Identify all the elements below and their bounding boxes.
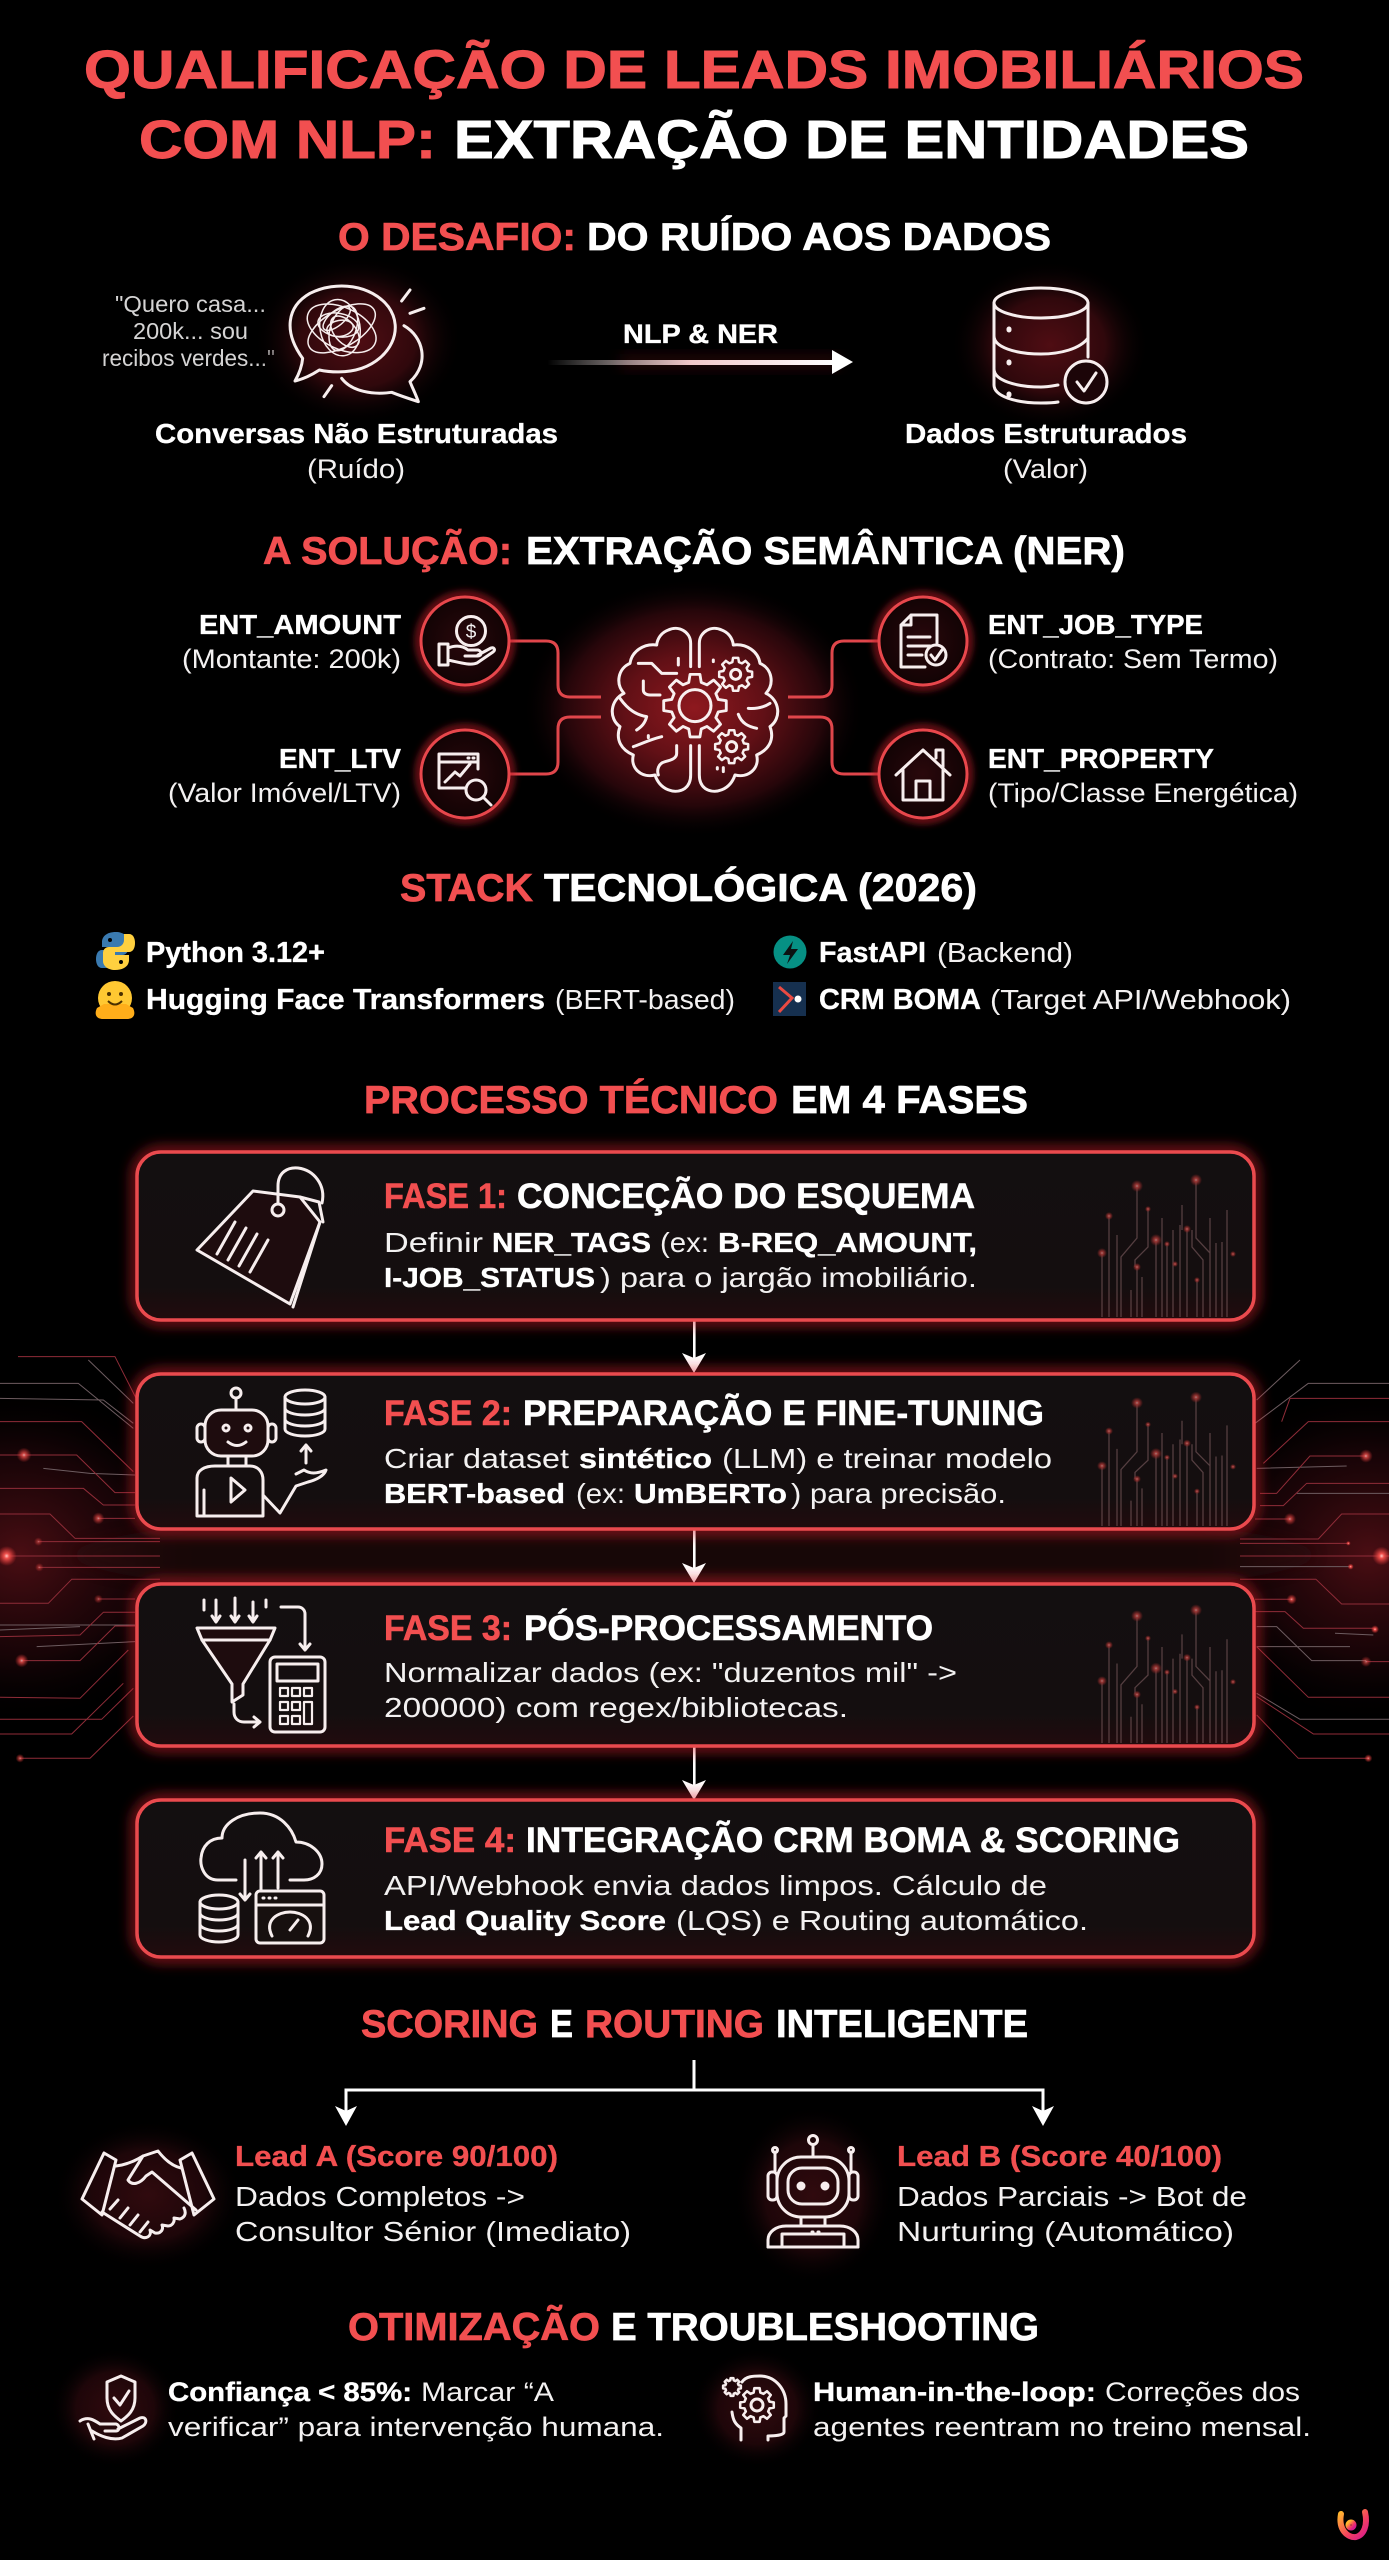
- text: fase 1: NER_TAGS: [492, 1227, 651, 1258]
- text: fase 4: (LQS) e Routing automático.: [676, 1905, 1088, 1936]
- text: confidence: Confiança < 85%:: [168, 2377, 412, 2407]
- text: lead B: Lead B (Score 40/100): [897, 2141, 1222, 2173]
- panel: tech stack list: [96, 932, 1291, 1019]
- icon: tangled chat bubbles: [253, 255, 463, 425]
- node: ENT_AMOUNT: $: [466, 622, 477, 643]
- text: fase 2: (LLM) e treinar modelo: [722, 1443, 1052, 1474]
- panel: noise to data: [102, 255, 1187, 484]
- icon: crm boma: [773, 982, 806, 1016]
- text: hugging face: [146, 984, 735, 1016]
- label: structured data: [905, 418, 1187, 484]
- quote text: [102, 291, 275, 371]
- text: lead A: [235, 2141, 631, 2247]
- icon: robot with database: [197, 1388, 326, 1516]
- text: crm boma: (Target API/Webhook): [990, 984, 1291, 1015]
- heading: processo técnico: [364, 1078, 1028, 1122]
- heading: o desafio: DO RUÍDO AOS DADOS: [587, 215, 1051, 259]
- heading: a solução: EXTRAÇÃO SEMÂNTICA (NER): [526, 529, 1125, 573]
- connectors: [509, 641, 880, 774]
- text: human in the loop: Correções dos: [1105, 2377, 1300, 2407]
- quote text: 200k... sou: [133, 318, 248, 344]
- text: fase 1: FASE 1:: [384, 1177, 507, 1216]
- heading: scoring e routing: E: [550, 2003, 573, 2046]
- panel: fase 2: [137, 1374, 1254, 1529]
- text: crm boma: CRM BOMA: [819, 984, 981, 1016]
- icon: head with gears: [692, 2348, 822, 2468]
- heading: stack tecnológica: STACK: [400, 867, 533, 910]
- icon: fastapi: [774, 936, 806, 968]
- heading: scoring e routing: SCORING: [361, 2003, 538, 2046]
- text: confidence: [168, 2377, 664, 2442]
- text: lead B: Dados Parciais -> Bot de: [897, 2181, 1247, 2212]
- arrows between phases: [682, 1320, 706, 1800]
- text: lead A: Dados Completos ->: [235, 2181, 525, 2212]
- icon: cloud, database and dashboard: [200, 1813, 324, 1943]
- text: fase 4: INTEGRAÇÃO CRM BOMA & SCORING: [526, 1821, 1180, 1860]
- text: fase 1: CONCEÇÃO DO ESQUEMA: [517, 1177, 975, 1216]
- label: unstructured conversations: [155, 418, 558, 484]
- heading: otimização: E TROUBLESHOOTING: [611, 2306, 1039, 2349]
- text: fase 2: [384, 1394, 1052, 1509]
- heading: processo técnico: EM 4 FASES: [791, 1079, 1028, 1122]
- text: ENT_JOB_TYPE: (Contrato: Sem Termo): [988, 644, 1278, 674]
- icon: hugging face: [96, 981, 134, 1019]
- title: EXTRAÇÃO DE ENTIDADES: [454, 110, 1249, 170]
- text: fase 2: BERT-based: [384, 1478, 565, 1509]
- text: fase 2: sintético: [579, 1443, 712, 1474]
- panel: confidence: [50, 2348, 664, 2468]
- node: ENT_PROPERTY: [877, 728, 969, 820]
- text: lead B: Nurturing (Automático): [897, 2216, 1234, 2247]
- icon: price tags: [197, 1168, 323, 1307]
- icon: brain with gears: [522, 578, 866, 838]
- text: human in the loop: agentes reentram no treino mensal.: [813, 2412, 1311, 2442]
- node: ENT_JOB_TYPE: [877, 595, 969, 687]
- text: python: Python 3.12+: [146, 937, 325, 969]
- heading: processo técnico: PROCESSO TÉCNICO: [364, 1078, 778, 1122]
- text: fase 1: ) para o jargão imobiliário.: [600, 1262, 977, 1293]
- heading: scoring e routing: [361, 2003, 1028, 2046]
- icon: brand logo: [1340, 2512, 1366, 2537]
- panel: fase 3: [137, 1584, 1254, 1746]
- text: lead A: Lead A (Score 90/100): [235, 2141, 558, 2173]
- text: fastapi: FastAPI: [819, 937, 926, 969]
- icon: shield in hand: [50, 2348, 180, 2468]
- text: ENT_AMOUNT: [182, 609, 401, 674]
- text: lead B: [897, 2141, 1247, 2247]
- text: confidence: Marcar “A: [421, 2377, 554, 2407]
- text: confidence: verificar” para intervenção humana.: [168, 2412, 664, 2442]
- panel: fase 4: [137, 1800, 1254, 1957]
- node: ENT_AMOUNT: [419, 595, 511, 687]
- text: fase 1: [384, 1177, 977, 1293]
- label: unstructured conversations: (Ruído): [307, 454, 405, 484]
- text: fase 2: UmBERTo: [634, 1478, 787, 1509]
- text: ENT_JOB_TYPE: ENT_JOB_TYPE: [988, 609, 1203, 640]
- text: ENT_AMOUNT: (Montante: 200k): [182, 644, 401, 674]
- heading: o desafio: O DESAFIO:: [338, 216, 576, 259]
- text: fase 1: Definir: [384, 1227, 483, 1258]
- heading: scoring e routing: ROUTING: [585, 2003, 764, 2046]
- text: fase 3: Normalizar dados (ex: "duzentos mil" ->: [384, 1657, 957, 1688]
- background: circuit glow behind process cards: [0, 1357, 1389, 1763]
- heading: otimização: [348, 2305, 1039, 2349]
- arrow: routing tree: [335, 2060, 1054, 2126]
- icon: robot: [733, 2105, 893, 2285]
- heading: stack tecnológica: TECNOLÓGICA (2026): [544, 866, 977, 910]
- text: fastapi: (Backend): [937, 937, 1073, 968]
- text: lead A: Consultor Sénior (Imediato): [235, 2216, 631, 2247]
- text: ENT_LTV: ENT_LTV: [279, 743, 401, 774]
- node: ENT_LTV: [419, 728, 511, 820]
- title: COM NLP:: [139, 110, 436, 170]
- text: fase 3: [384, 1608, 957, 1723]
- text: fase 2: PREPARAÇÃO E FINE-TUNING: [523, 1394, 1044, 1433]
- quote text: recibos verdes...": [102, 345, 275, 371]
- label: structured data: Dados Estruturados: [905, 418, 1187, 449]
- heading: a solução: A SOLUÇÃO:: [263, 529, 512, 573]
- text: fase 2: Criar dataset: [384, 1443, 569, 1474]
- text: fase 4: [384, 1821, 1180, 1936]
- panel: fase 1: [137, 1152, 1254, 1320]
- text: ENT_PROPERTY: ENT_PROPERTY: [988, 743, 1214, 774]
- text: ENT_LTV: [168, 743, 401, 808]
- icon: funnel and calculator: [197, 1598, 325, 1732]
- text: ENT_LTV: (Valor Imóvel/LTV): [168, 778, 401, 808]
- text: ENT_PROPERTY: (Tipo/Classe Energética): [988, 778, 1298, 808]
- text: fase 1: (ex:: [660, 1227, 709, 1258]
- title: QUALIFICAÇÃO DE LEADS IMOBILIÁRIOS: [84, 40, 1304, 100]
- text: ENT_JOB_TYPE: [988, 609, 1278, 674]
- label: unstructured conversations: Conversas Não Estruturadas: [155, 418, 558, 449]
- quote text: "Quero casa...: [115, 291, 266, 317]
- text: fase 1: B-REQ_AMOUNT,: [718, 1227, 977, 1258]
- text: hugging face: (BERT-based): [555, 984, 735, 1015]
- panel: human in the loop: [692, 2348, 1311, 2468]
- text: ENT_PROPERTY: [988, 743, 1298, 808]
- heading: scoring e routing: INTELIGENTE: [776, 2003, 1028, 2046]
- text: fase 4: API/Webhook envia dados limpos. Cálculo de: [384, 1870, 1047, 1901]
- text: fase 2: FASE 2:: [384, 1394, 512, 1433]
- panel: lead A: [53, 2120, 631, 2270]
- heading: stack tecnológica: [400, 866, 977, 910]
- panel: lead B: [733, 2105, 1247, 2285]
- text: fase 4: Lead Quality Score: [384, 1905, 666, 1936]
- heading: o desafio: [338, 215, 1051, 259]
- icon: handshake: [53, 2120, 243, 2270]
- heading: a solução: [263, 529, 1125, 573]
- arrow: NLP and NER: NLP & NER: [623, 319, 778, 349]
- text: ENT_AMOUNT: ENT_AMOUNT: [199, 609, 401, 640]
- text: fase 1: I-JOB_STATUS: [384, 1262, 595, 1293]
- label: structured data: (Valor): [1003, 454, 1088, 484]
- panel: semantic extraction diagram: [168, 578, 1298, 838]
- icon: database with check: [950, 260, 1150, 430]
- text: fase 2: ) para precisão.: [791, 1478, 1006, 1509]
- text: fase 2: (ex:: [576, 1478, 625, 1509]
- text: fase 4: FASE 4:: [384, 1821, 516, 1860]
- text: fase 3: 200000) com regex/bibliotecas.: [384, 1692, 848, 1723]
- text: hugging face: Hugging Face Transformers: [146, 984, 545, 1016]
- text: fase 3: FASE 3:: [384, 1609, 512, 1648]
- text: fastapi: [819, 937, 1073, 969]
- text: fase 3: PÓS-PROCESSAMENTO: [524, 1608, 933, 1648]
- title: [84, 40, 1304, 170]
- text: human in the loop: Human-in-the-loop:: [813, 2377, 1096, 2407]
- text: human in the loop: [813, 2377, 1311, 2442]
- text: crm boma: [819, 984, 1291, 1016]
- arrow: NLP and NER: [547, 319, 853, 374]
- heading: otimização: OTIMIZAÇÃO: [348, 2305, 600, 2349]
- icon: python: [96, 932, 135, 970]
